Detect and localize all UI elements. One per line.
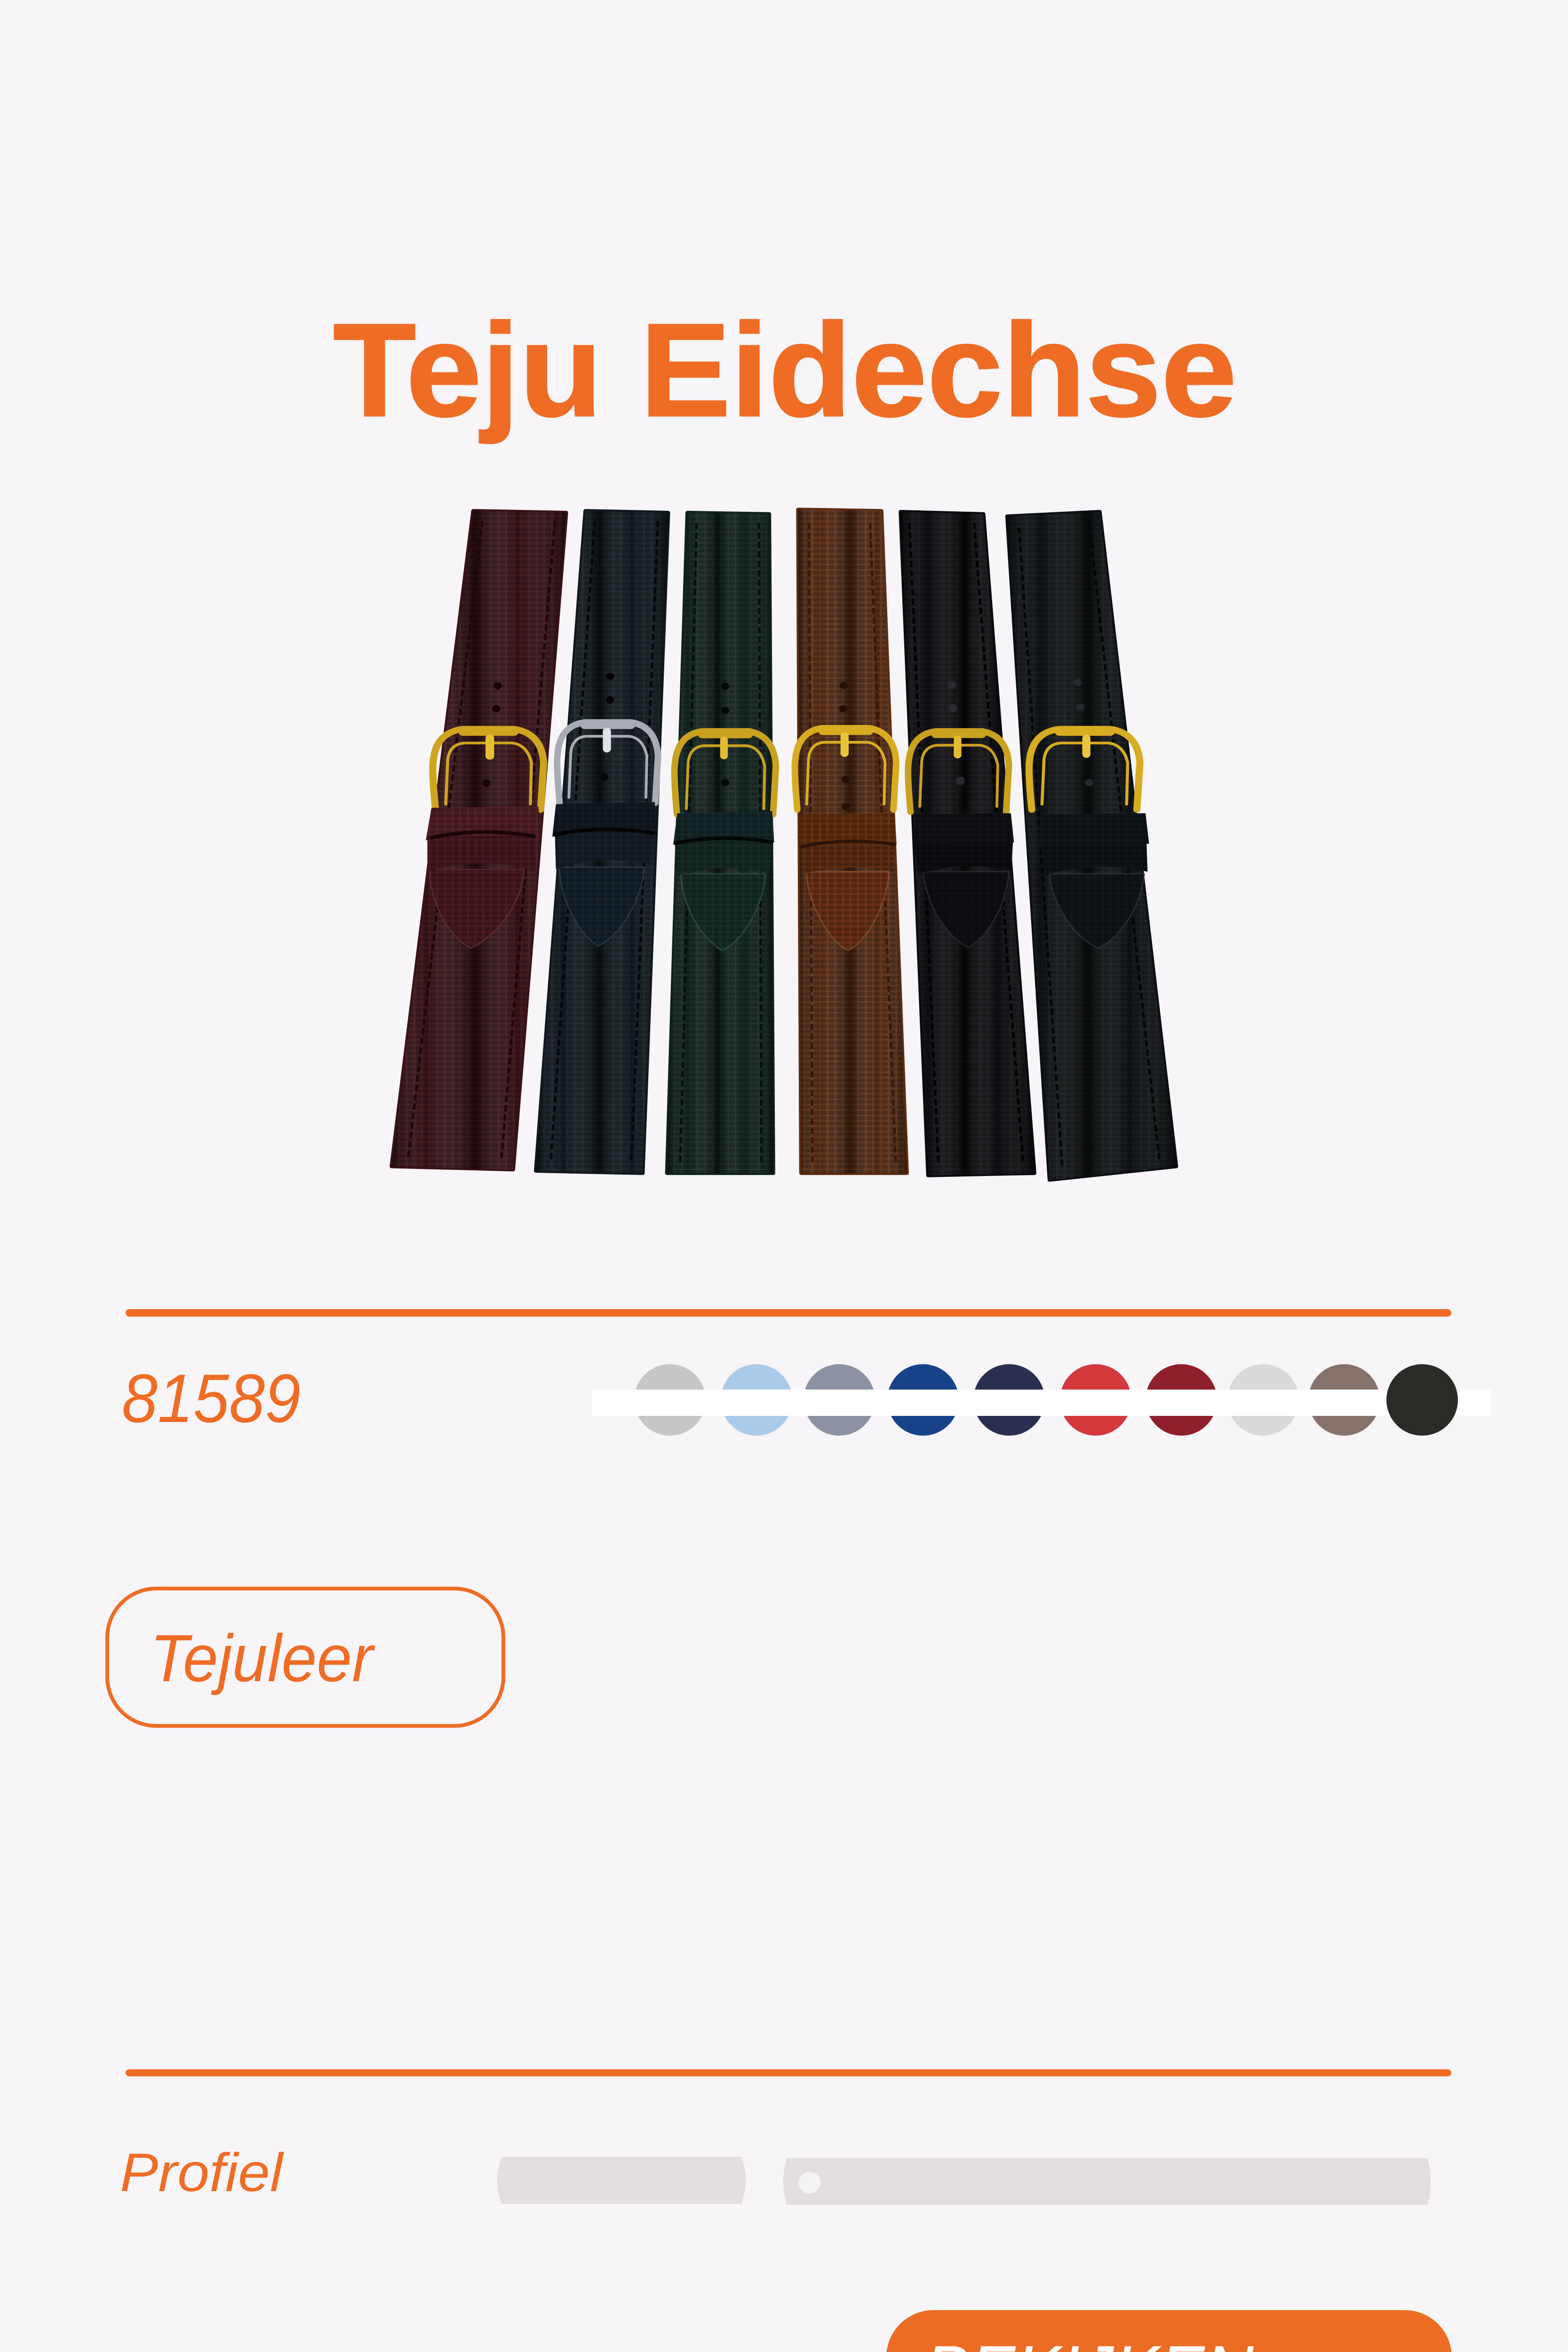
divider: lower orange rule (126, 2069, 1451, 2076)
profile label: Profiel (120, 2143, 285, 2203)
colour swatches (592, 1364, 1491, 1436)
strap: burgundy (392, 511, 566, 1169)
article number: 81589 (122, 1360, 301, 1437)
strap: black glossy (901, 512, 1035, 1176)
profile shape: long section with hole (783, 2158, 1431, 2205)
strap: navy (536, 511, 668, 1173)
profile shape: short section (497, 2157, 746, 2204)
strap: brown (795, 509, 907, 1173)
photo: six lizard leather watch straps (392, 509, 1176, 1180)
divider: upper orange rule (126, 1309, 1451, 1317)
title: Teju Eidechse (333, 296, 1237, 445)
material tag: Tejuleer (107, 1589, 503, 1726)
material tag: Tejuleer: Tejuleer (150, 1621, 375, 1696)
strap: black matte (1007, 512, 1176, 1180)
button: BEKIJKEN (886, 2310, 1452, 2352)
strap: dark green (667, 513, 776, 1173)
